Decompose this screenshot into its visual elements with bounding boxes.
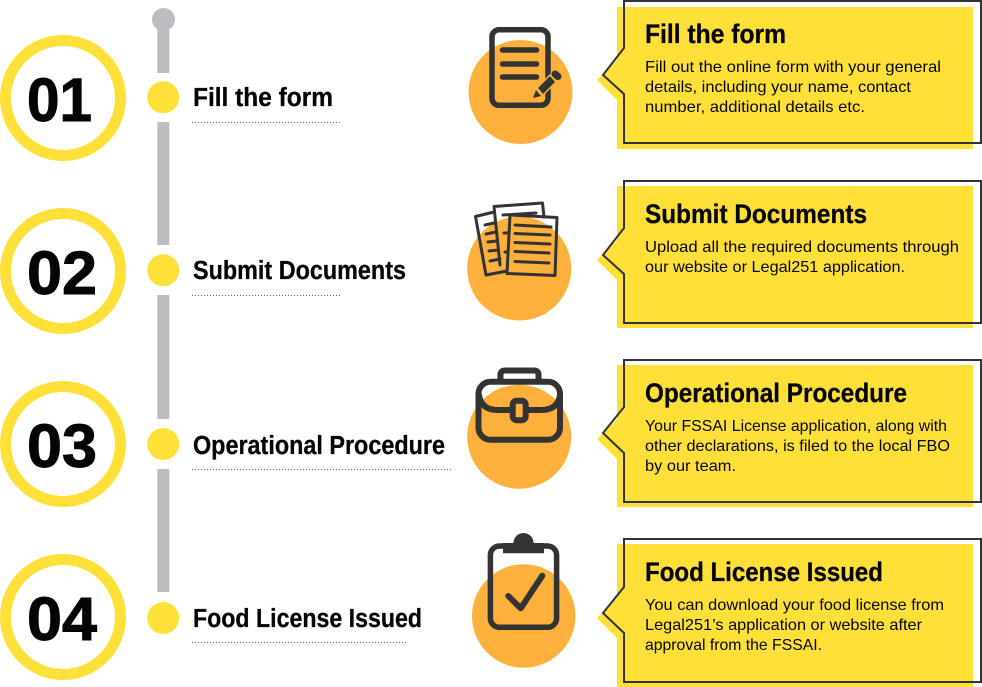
number badge 03: 03	[27, 412, 97, 480]
step label 4: Food License Issued	[193, 605, 422, 633]
timeline line	[152, 8, 175, 592]
panel body text: approval from the FSSAI.	[645, 637, 822, 654]
icon: clipboard check	[472, 533, 575, 668]
step label 1: Fill the form	[193, 84, 333, 112]
icon: briefcase	[467, 370, 571, 489]
timeline dot 1	[147, 81, 179, 113]
number badge 04	[6, 560, 120, 674]
panel body text	[645, 418, 950, 475]
panel body text: You can download your food license from	[645, 597, 944, 614]
panel body text	[645, 239, 959, 276]
step 1 row	[6, 40, 340, 156]
panel: food license issued	[597, 539, 981, 687]
timeline dot 3	[147, 428, 179, 460]
icon: form with pencil	[468, 30, 572, 144]
panel heading: Operational Procedure	[645, 378, 907, 408]
number badge 02	[6, 214, 120, 328]
number badge 02: 02	[27, 239, 97, 307]
timeline dot 4	[147, 602, 179, 634]
panel body text: Legal251’s application or website after	[645, 617, 922, 634]
step 4 row	[6, 560, 422, 674]
panel heading: Fill the form	[645, 19, 786, 49]
number badge 04: 04	[27, 585, 97, 653]
panel: operational procedure	[597, 360, 981, 507]
panel heading: Food License Issued	[645, 557, 883, 587]
number badge 01: 01	[27, 66, 92, 134]
icon: documents	[467, 203, 571, 320]
panel body text: our website or Legal251 application.	[645, 259, 905, 276]
panel body text	[645, 59, 941, 116]
panel body text	[645, 597, 944, 654]
step label 2: Submit Documents	[193, 257, 406, 285]
step label 3: Operational Procedure	[193, 432, 445, 460]
panel: fill the form	[597, 1, 981, 149]
timeline dot 2	[147, 254, 179, 286]
panel body text: Fill out the online form with your general	[645, 59, 941, 76]
step 3 row	[6, 386, 451, 502]
panel body text: Upload all the required documents through	[645, 239, 959, 256]
step 2 row	[6, 214, 406, 328]
panel heading: Submit Documents	[645, 199, 867, 229]
number badge 03	[6, 386, 120, 502]
panel body text: by our team.	[645, 458, 736, 475]
panel body text: other declarations, is filed to the local FBO	[645, 438, 950, 455]
panel: submit documents	[597, 181, 981, 328]
panel body text: number, additional details etc.	[645, 99, 865, 116]
panel body text: details, including your name, contact	[645, 79, 912, 96]
panel body text: Your FSSAI License application, along with	[645, 418, 947, 435]
number badge 01	[6, 40, 120, 156]
